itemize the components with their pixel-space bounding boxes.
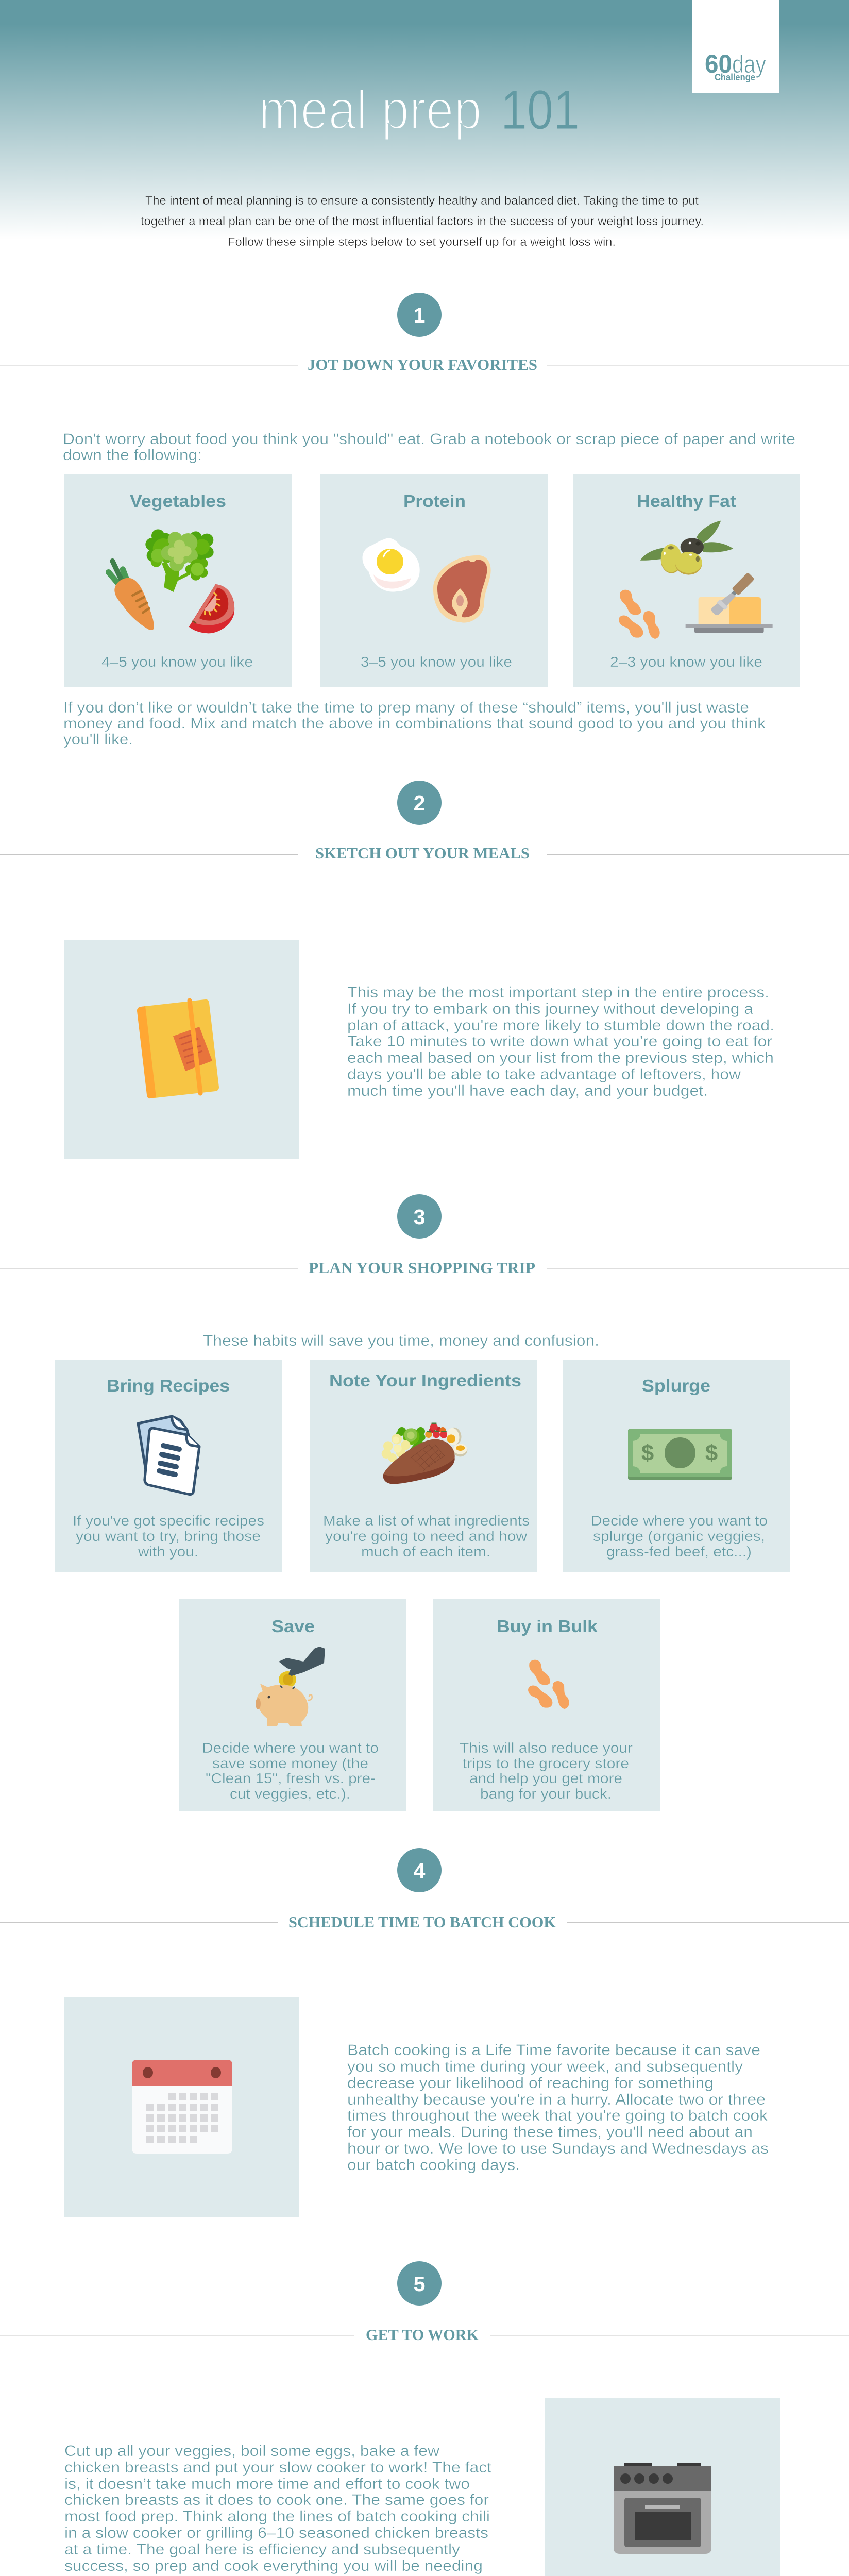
step 4 badge: 4 bbox=[414, 1859, 426, 1883]
step 3 badge bbox=[397, 1194, 442, 1239]
title: meal prep bbox=[259, 78, 482, 141]
step 5 body text: chicken breasts and put your slow cooker to work! The fact bbox=[64, 2459, 492, 2476]
step 4 badge bbox=[397, 1848, 442, 1892]
panel: calendar bbox=[64, 1997, 299, 2217]
card text: Decide where you want to bbox=[202, 1740, 379, 1756]
icon: peanuts bbox=[528, 1660, 569, 1709]
icon: olives, peanuts, butter bbox=[619, 521, 773, 639]
card text: you're going to need and how bbox=[325, 1528, 528, 1544]
step 4 body text: our batch cooking days. bbox=[347, 2157, 520, 2174]
panel: buy in bulk bbox=[433, 1599, 660, 1811]
logo: 60 day challenge: Challenge bbox=[715, 72, 755, 82]
card text: you want to try, bring those bbox=[76, 1528, 261, 1544]
panel: stove bbox=[545, 2398, 780, 2576]
panel: save bbox=[179, 1599, 406, 1811]
step 1 intro text: down the following: bbox=[63, 447, 202, 464]
card text bbox=[591, 1513, 768, 1560]
panel: bring recipes bbox=[55, 1360, 282, 1572]
card text: trips to the grocery store bbox=[463, 1755, 629, 1771]
step 5 body text: most food prep. Think along the lines of batch cooking chili bbox=[64, 2508, 490, 2525]
card text: bang for your buck. bbox=[480, 1786, 612, 1802]
logo: 60 day challenge bbox=[692, 0, 779, 93]
icon: stove bbox=[614, 2463, 711, 2554]
logo: 60 day challenge: 60 bbox=[705, 49, 732, 78]
step 4 body text: Batch cooking is a Life Time favorite because it can save bbox=[347, 2042, 760, 2059]
step 4 body text bbox=[347, 2042, 769, 2174]
panel: splurge bbox=[563, 1360, 790, 1572]
card title: Bring Recipes bbox=[107, 1376, 230, 1395]
panel: note your ingredients bbox=[310, 1360, 537, 1572]
card text: save some money (the bbox=[212, 1755, 368, 1771]
card text: cut veggies, etc.). bbox=[230, 1786, 350, 1802]
step 2 body text: days you'll be able to take advantage of leftovers, how bbox=[347, 1066, 741, 1083]
card title: Save bbox=[271, 1617, 315, 1636]
heading: jot down your favorites: JOT DOWN YOUR FAVORITES bbox=[308, 355, 537, 374]
step 1 closing text: money and food. Mix and match the above in combinations that sound good to you and you think bbox=[63, 715, 766, 732]
step 5 body text: in a slow cooker or grilling 6–10 seasoned chicken breasts bbox=[64, 2524, 488, 2541]
step 5 body text: at a time. The goal here is efficiency and subsequently bbox=[64, 2541, 460, 2558]
step 4 body text: times throughout the week that you're going to batch cook bbox=[347, 2107, 768, 2124]
card title: Healthy Fat bbox=[637, 492, 736, 511]
intro text: together a meal plan can be one of the most influential factors in the success of your weight loss journey. bbox=[141, 214, 704, 228]
card text: splurge (organic veggies, bbox=[593, 1528, 765, 1544]
icon: notebook bbox=[137, 999, 219, 1098]
card text: "Clean 15", fresh vs. pre- bbox=[206, 1770, 376, 1786]
card text bbox=[323, 1513, 530, 1560]
step 5 body text: is, it doesn’t take much more time and effort to cook two bbox=[64, 2476, 470, 2493]
step 2 body text: each meal based on your list from the previous step, which bbox=[347, 1049, 774, 1066]
intro text bbox=[141, 194, 704, 248]
card text: with you. bbox=[138, 1544, 198, 1560]
heading: plan your shopping trip: PLAN YOUR SHOPPING TRIP bbox=[309, 1259, 535, 1277]
card text: If you've got specific recipes bbox=[73, 1513, 264, 1529]
step 5 badge bbox=[397, 2261, 442, 2306]
step 1 closing text: you'll like. bbox=[63, 731, 133, 748]
card caption: 4–5 you know you like bbox=[101, 654, 253, 670]
icon: dollar bill: $ bbox=[705, 1440, 718, 1466]
step 4 body text: hour or two. We love to use Sundays and Wednesdays as bbox=[347, 2140, 769, 2157]
logo: 60 day challenge: day bbox=[732, 51, 766, 78]
step 1 intro text bbox=[63, 431, 795, 464]
card text: Make a list of what ingredients bbox=[323, 1513, 530, 1529]
step 4 body text: unhealthy because you're in a hurry. Allocate two or three bbox=[347, 2091, 766, 2108]
header gradient band bbox=[0, 0, 849, 240]
card text bbox=[460, 1740, 633, 1802]
card text: This will also reduce your bbox=[460, 1740, 633, 1756]
card text bbox=[202, 1740, 379, 1802]
icon: dollar bill bbox=[628, 1429, 732, 1480]
card text: grass-fed beef, etc...) bbox=[606, 1544, 752, 1560]
card title: Note Your Ingredients bbox=[329, 1371, 521, 1390]
step 5 body text: Cut up all your veggies, boil some eggs, bake a few bbox=[64, 2443, 439, 2460]
card text bbox=[73, 1513, 264, 1560]
icon: piggy bank with coin and hand bbox=[256, 1647, 325, 1726]
icon: fried egg and steak bbox=[363, 538, 491, 623]
icon: dollar bill: $ bbox=[641, 1440, 654, 1466]
step 5 body text: success, so prep and cook everything you will be needing bbox=[64, 2557, 483, 2574]
step 3 badge: 3 bbox=[414, 1205, 425, 1229]
step 1 badge bbox=[397, 293, 442, 337]
card title: Buy in Bulk bbox=[497, 1617, 598, 1636]
step 1 badge: 1 bbox=[414, 303, 425, 327]
card text: and help you get more bbox=[469, 1770, 622, 1786]
card text: Decide where you want to bbox=[591, 1513, 768, 1529]
step 2 badge bbox=[397, 781, 442, 825]
step 2 body text: This may be the most important step in the entire process. bbox=[347, 984, 769, 1001]
heading: get to work: GET TO WORK bbox=[366, 2326, 479, 2344]
card title: Splurge bbox=[642, 1376, 710, 1395]
step 1 intro text: Don't worry about food you think you "should" eat. Grab a notebook or scrap piece of paper and write bbox=[63, 431, 795, 448]
panel: protein bbox=[320, 474, 548, 687]
step 5 badge: 5 bbox=[414, 2272, 425, 2296]
step 2 body text: much time you'll have each day, and your budget. bbox=[347, 1082, 708, 1099]
panel: notebook bbox=[64, 940, 299, 1159]
panel: vegetables bbox=[64, 474, 292, 687]
title: 101 bbox=[501, 78, 580, 141]
intro text: The intent of meal planning is to ensure a consistently healthy and balanced diet. Taking the time to put bbox=[145, 194, 699, 207]
step 4 body text: for your meals. During these times, you'll need about an bbox=[347, 2124, 753, 2141]
step 2 badge: 2 bbox=[414, 791, 425, 815]
panel: healthy fat bbox=[573, 474, 800, 687]
step 1 closing text bbox=[63, 699, 766, 748]
step 2 body text bbox=[347, 984, 774, 1099]
icon: steak, vegetables and egg plate bbox=[382, 1423, 467, 1484]
step 4 body text: decrease your likelihood of reaching for something bbox=[347, 2075, 714, 2092]
card title: Protein bbox=[403, 492, 466, 511]
step 4 body text: you so much time during your week, and subsequently bbox=[347, 2058, 743, 2075]
step 5 body text bbox=[64, 2443, 492, 2576]
step 5 body text: chicken breasts as it does to cook one. The same goes for bbox=[64, 2492, 489, 2509]
step 2 body text: If you try to embark on this journey without developing a bbox=[347, 1001, 753, 1018]
card title: Vegetables bbox=[130, 492, 226, 511]
card text: much of each item. bbox=[361, 1544, 490, 1560]
icon: carrot, broccoli, tomato bbox=[109, 529, 234, 633]
heading: sketch out your meals: SKETCH OUT YOUR MEALS bbox=[315, 844, 530, 862]
icon: recipe pages bbox=[138, 1416, 199, 1495]
icon: calendar bbox=[132, 2060, 232, 2154]
step 3 intro text: These habits will save you time, money and confusion. bbox=[203, 1332, 599, 1349]
step 2 body text: plan of attack, you're more likely to stumble down the road. bbox=[347, 1017, 774, 1034]
card caption: 3–5 you know you like bbox=[361, 654, 512, 670]
card caption: 2–3 you know you like bbox=[610, 654, 762, 670]
intro text: Follow these simple steps below to set yourself up for a weight loss win. bbox=[228, 235, 616, 248]
step 2 body text: Take 10 minutes to write down what you're going to eat for bbox=[347, 1033, 772, 1050]
step 1 closing text: If you don’t like or wouldn’t take the time to prep many of these “should” items, you'll just waste bbox=[63, 699, 749, 716]
heading: schedule time to batch cook: SCHEDULE TIME TO BATCH COOK bbox=[288, 1913, 556, 1931]
